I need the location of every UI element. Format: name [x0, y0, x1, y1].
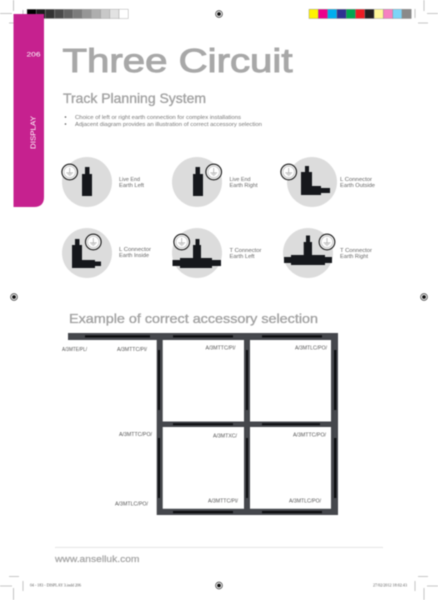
accessory: live end earth right: Live End: [230, 177, 250, 183]
accessory: L connector earth outside: L Connector: [340, 177, 372, 183]
section heading: Example of correct accessory selection: [69, 311, 318, 326]
page number: 206: [26, 52, 41, 58]
website: www.anselluk.com: [54, 554, 140, 564]
accessory codes: A/3MTLC/PO/: [295, 346, 328, 352]
accessory: L connector earth inside: L Connector: [119, 247, 151, 253]
accessory: live end earth left: Live End: [119, 177, 140, 183]
accessory codes: A/3MTE/PL/: [62, 347, 88, 353]
accessory codes: A/3MTLC/PO/: [289, 498, 322, 504]
footer rule: [55, 546, 383, 549]
grayscale colour bar: [27, 9, 128, 18]
bullet list: Adjacent diagram provides an illustration of correct accessory selection: [75, 122, 262, 128]
track slots: [85, 335, 336, 513]
accessory codes: A/3MTTC/PO/: [293, 432, 327, 438]
process colour bar: [309, 9, 411, 18]
section label: DISPLAY: [28, 116, 38, 149]
accessory: L connector earth inside: Earth Inside: [119, 253, 149, 259]
accessory: live end earth right: Earth Right: [230, 183, 258, 189]
accessory: T connector earth left: [172, 228, 262, 278]
accessory codes: A/3MTXC/: [213, 434, 238, 440]
accessory: T connector earth left: T Connector: [230, 248, 262, 254]
accessory codes: A/3MTTC/PO/: [119, 432, 153, 438]
bullet list: [65, 115, 262, 128]
accessory: live end earth right: [172, 157, 258, 207]
subtitle: Track Planning System: [63, 90, 206, 106]
accessory: live end earth left: [62, 157, 145, 207]
accessory codes: [62, 346, 328, 508]
title: Three Circuit: [62, 43, 293, 80]
bullet list: Choice of left or right earth connection for complex installations: [75, 115, 241, 121]
accessory codes: A/3MTLC/PO/: [115, 502, 149, 508]
registration mark: left: [11, 294, 17, 300]
print slug left: 04 - 183 - DISPLAY 3.indd 206: [30, 584, 81, 588]
accessory codes: A/3MTTC/PI/: [206, 346, 236, 352]
accessory: live end earth left: Earth Left: [119, 183, 145, 189]
accessory: L connector earth inside: [62, 228, 151, 278]
accessory: T connector earth right: T Connector: [340, 248, 372, 254]
registration mark: bottom: [216, 582, 222, 589]
track frame: [68, 333, 338, 515]
accessory codes: A/3MTTC/PI/: [117, 347, 148, 353]
registration mark: right: [421, 294, 427, 300]
track layout diagram: [62, 333, 338, 515]
accessory: T connector earth right: Earth Right: [340, 254, 369, 260]
magenta side tab: [14, 14, 44, 207]
registration mark: top: [216, 11, 222, 17]
accessory codes: A/3MTTC/PI/: [208, 498, 239, 504]
accessory: T connector earth right: [283, 228, 372, 278]
accessory: L connector earth outside: [281, 157, 375, 207]
print slug right: 27/02/2012 18:02:43: [373, 584, 407, 588]
accessory: T connector earth left: Earth Left: [230, 254, 255, 260]
accessory: L connector earth outside: Earth Outside: [340, 183, 375, 189]
